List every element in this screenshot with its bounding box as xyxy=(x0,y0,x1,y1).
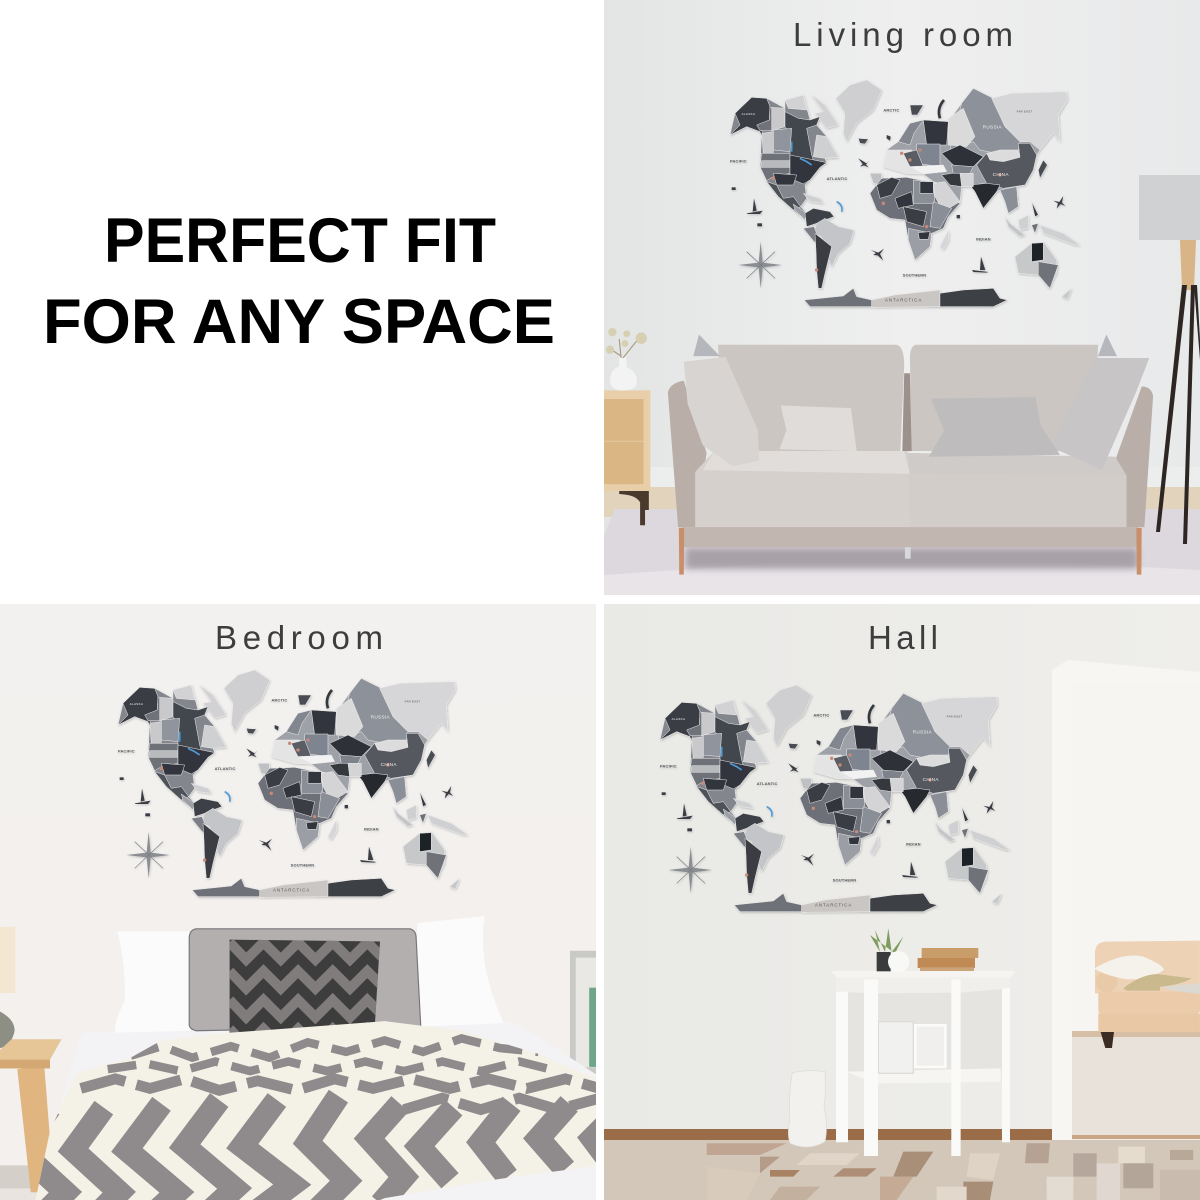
world map: bedroom: ATLANTIC xyxy=(215,766,236,771)
gray cushion xyxy=(189,929,421,1031)
rug light streak xyxy=(604,567,1200,595)
world map: living room: ARCTIC xyxy=(883,108,899,113)
title xyxy=(43,206,555,357)
panel: bedroom xyxy=(0,604,627,1200)
world map: living room: SOUTHERN xyxy=(903,273,926,278)
sofa and pillows xyxy=(604,328,1153,575)
door frame xyxy=(1052,660,1200,1142)
world map: hall: INDIAN xyxy=(906,842,921,847)
floor and baseboard xyxy=(0,1165,30,1188)
photo frames xyxy=(878,1022,945,1073)
mattress and sheet xyxy=(570,1058,595,1074)
world map: living room xyxy=(730,80,1080,307)
world map: bedroom: RUSSIA xyxy=(371,714,391,719)
wood floor xyxy=(604,1140,1200,1200)
panel: hall xyxy=(604,604,1200,1200)
world map: bedroom: ARCTIC xyxy=(271,698,287,703)
world map: living room: ALASKA xyxy=(742,112,755,116)
console table and decor xyxy=(788,928,1200,1156)
world map: living room: INDIAN xyxy=(976,237,991,242)
plant xyxy=(870,928,909,972)
world map: bedroom: SOUTHERN xyxy=(291,863,314,868)
world map: bedroom: ANTARCTICA xyxy=(273,888,310,893)
bed and furnishings xyxy=(0,916,627,1200)
world map: bedroom: CHINA xyxy=(381,762,397,767)
books xyxy=(918,948,978,971)
world map: hall: SOUTHERN xyxy=(833,878,856,883)
world map: hall: ALASKA xyxy=(672,717,685,721)
world map: hall: ANTARCTICA xyxy=(815,903,852,908)
panel: living room xyxy=(604,0,1200,595)
rug xyxy=(604,509,1200,575)
sofa seat xyxy=(695,451,910,527)
blanket xyxy=(19,1021,627,1200)
heading: living room: Living room xyxy=(793,16,1013,53)
shelf xyxy=(570,950,596,1074)
world map: hall: ARCTIC xyxy=(813,713,829,718)
world map: living room: PACIFIC xyxy=(730,159,747,164)
world map: living room: FAR EAST xyxy=(1017,110,1032,114)
world map: bedroom: ALASKA xyxy=(130,702,143,706)
nightstand xyxy=(604,390,650,525)
world map: hall: CHINA xyxy=(923,777,939,782)
baseboard and floor xyxy=(604,487,1200,517)
world map: living room: ANTARCTICA xyxy=(885,298,922,303)
pillow left xyxy=(115,932,190,1033)
table legs xyxy=(836,979,1010,1156)
adjoining room xyxy=(1070,682,1200,1139)
title: FOR ANY SPACE xyxy=(43,287,555,357)
world map: bedroom xyxy=(118,670,468,897)
table recess shade xyxy=(847,988,1003,1072)
sofa legs xyxy=(679,528,1142,575)
sofa in adjoining room xyxy=(1094,941,1200,1048)
table apron xyxy=(836,977,1010,993)
sofa shadow xyxy=(686,548,1138,569)
world map: living room: CHINA xyxy=(993,172,1009,177)
world map: hall xyxy=(660,685,1010,912)
lamp xyxy=(0,927,15,1048)
pillow right xyxy=(417,916,504,1027)
nightstand xyxy=(0,1039,62,1192)
lower shelf xyxy=(847,1068,1001,1083)
world map: living room: RUSSIA xyxy=(983,124,1003,129)
world map: living room: ATLANTIC xyxy=(827,176,848,181)
title: PERFECT FIT xyxy=(104,206,496,276)
world map: hall: ATLANTIC xyxy=(757,781,778,786)
chevron pillow xyxy=(230,940,380,1033)
world map: bedroom: PACIFIC xyxy=(118,749,135,754)
world map: hall: FAR EAST xyxy=(947,715,962,719)
world map: bedroom: FAR EAST xyxy=(405,700,420,704)
world map: bedroom: INDIAN xyxy=(364,827,379,832)
baseboard xyxy=(604,1129,1052,1140)
pillows xyxy=(684,334,1149,470)
sofa back cushions xyxy=(718,345,1098,451)
table top xyxy=(832,971,1015,979)
sofa arms xyxy=(668,381,707,527)
world map: hall: PACIFIC xyxy=(660,764,677,769)
heading: bedroom: Bedroom xyxy=(215,619,383,656)
floor lamp xyxy=(1139,175,1200,544)
white vase xyxy=(788,1071,826,1147)
vase and flowers xyxy=(606,328,647,391)
heading: hall: Hall xyxy=(868,619,938,656)
sofa base xyxy=(682,527,1138,547)
world map: hall: RUSSIA xyxy=(913,729,933,734)
